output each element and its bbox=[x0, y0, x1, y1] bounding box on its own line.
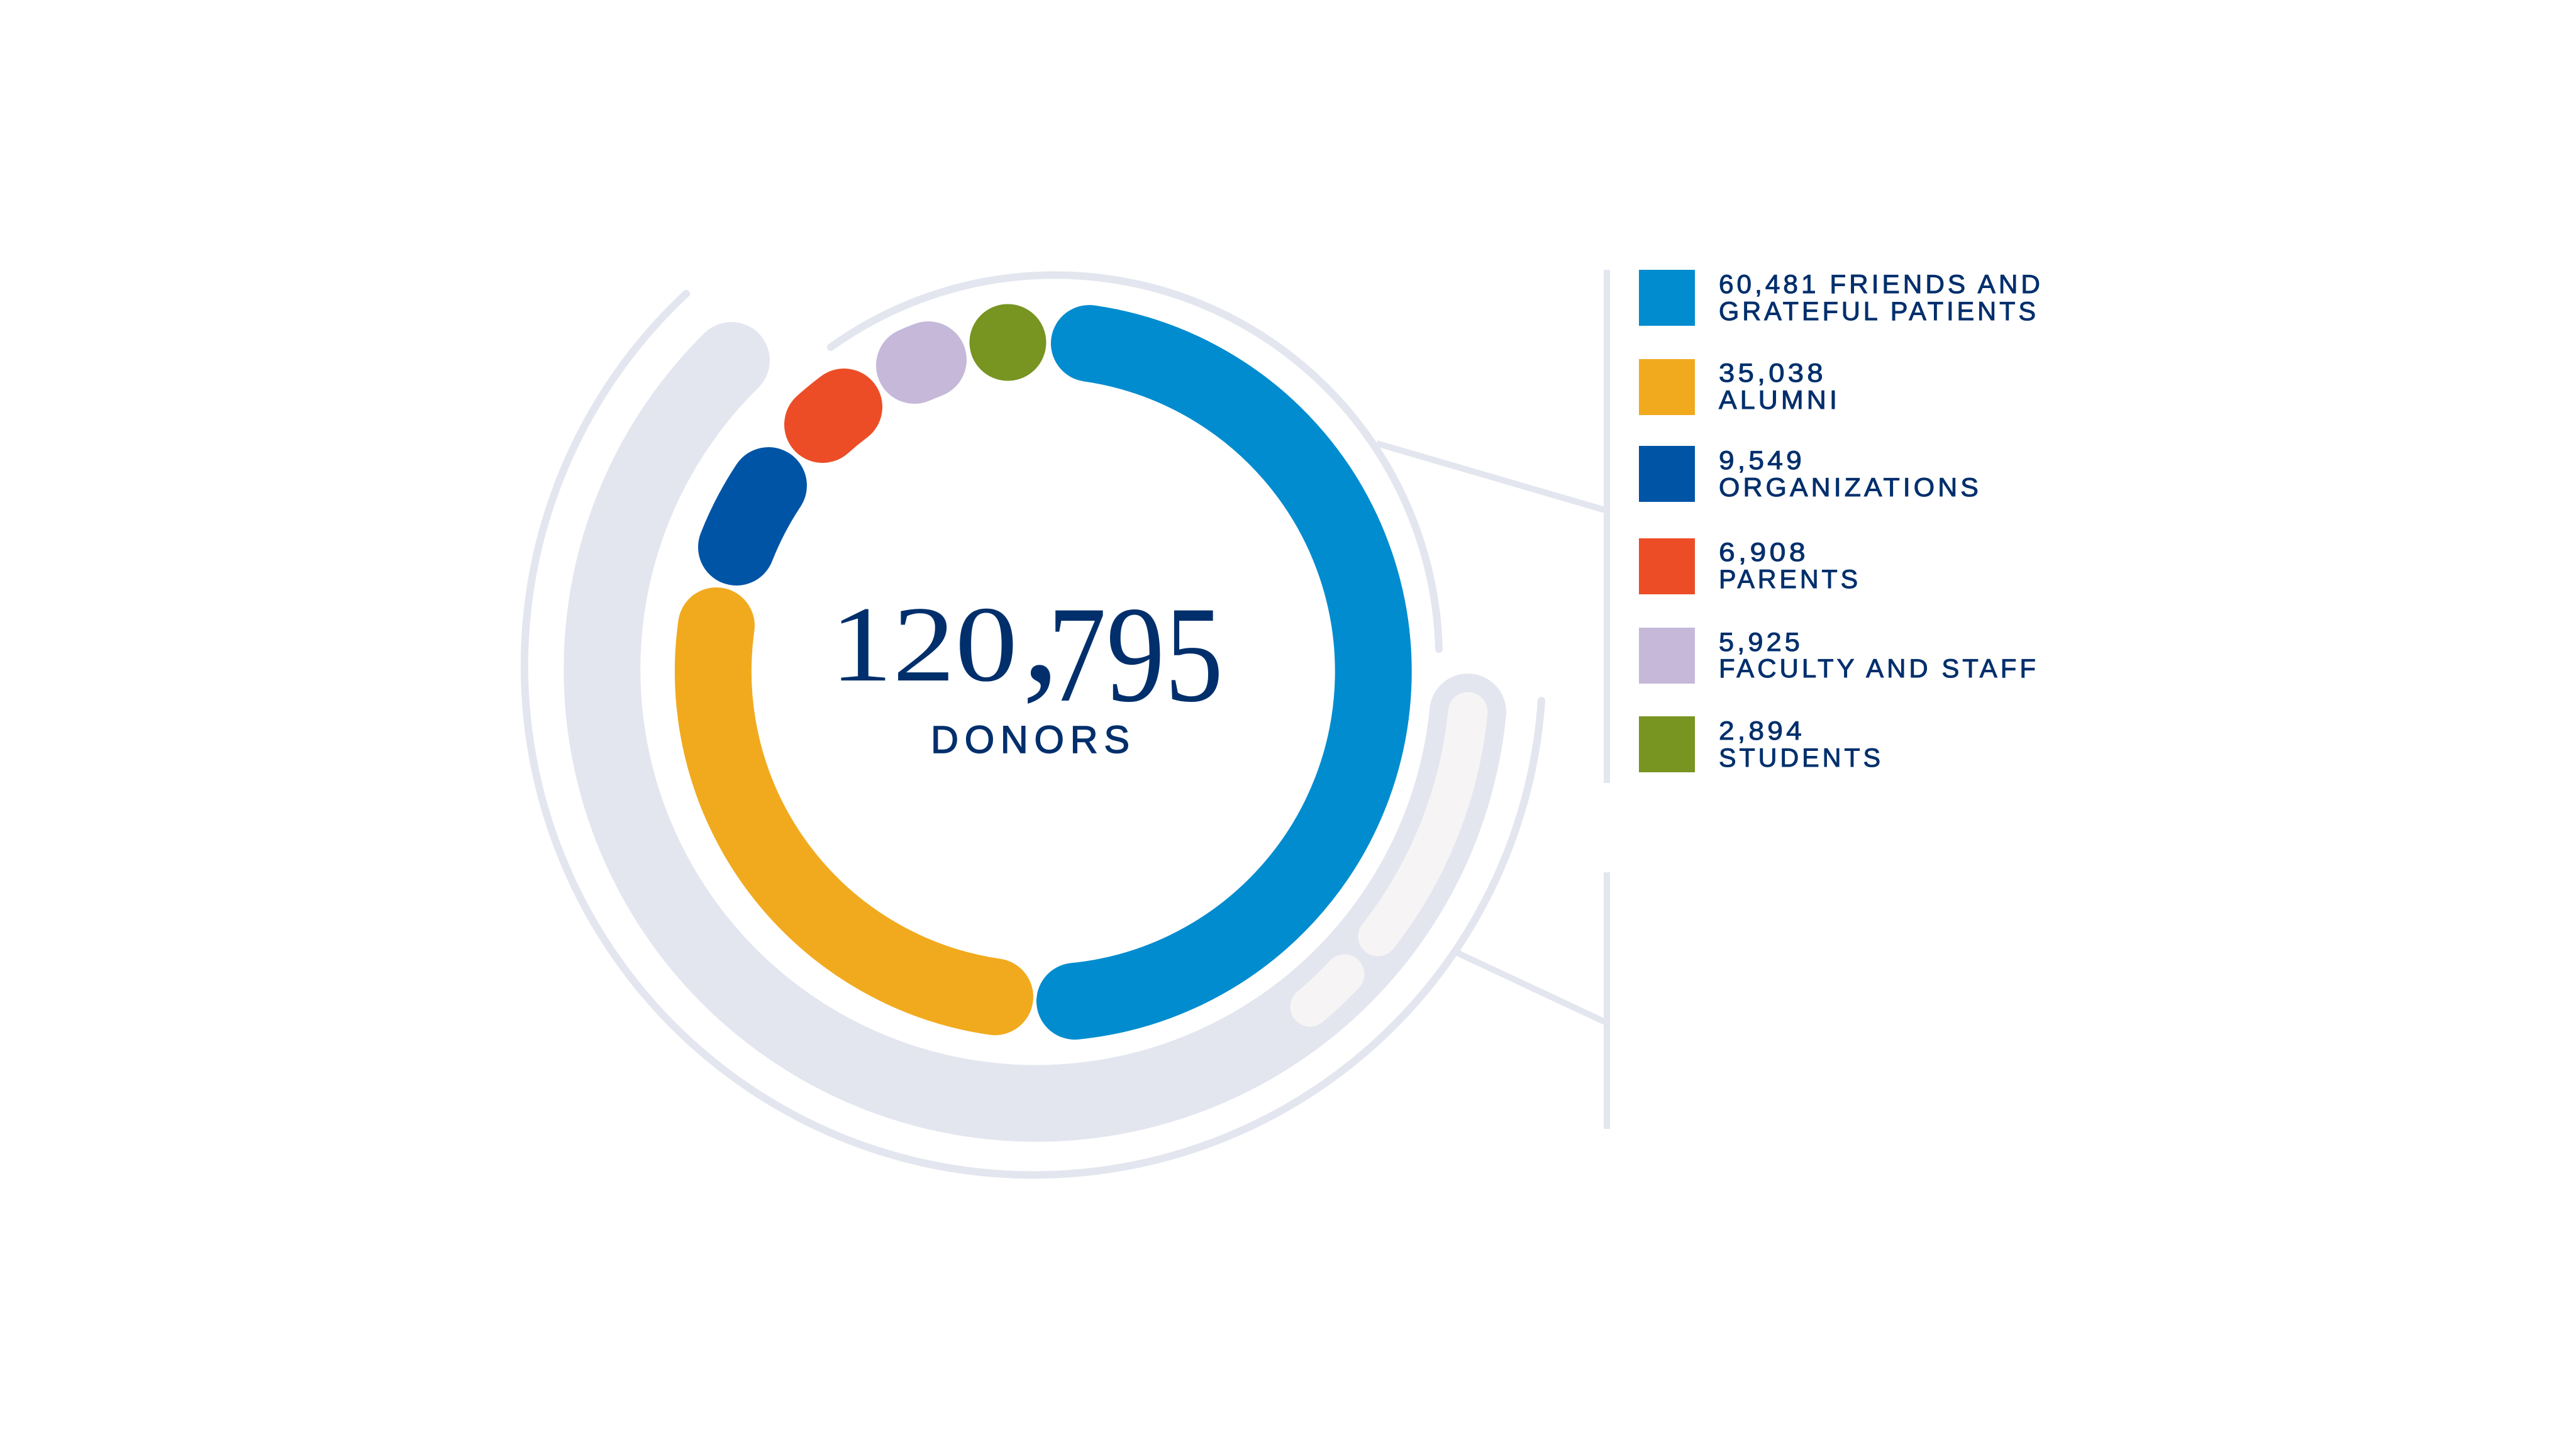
legend item: parents bbox=[1639, 537, 1861, 594]
grey background ring bbox=[602, 360, 1468, 1103]
segment: parents bbox=[823, 407, 844, 425]
segment: students bbox=[970, 304, 1046, 381]
segment: organizations bbox=[736, 486, 769, 547]
legend item: parents: PARENTS bbox=[1719, 564, 1861, 594]
legend item: organizations: ORGANIZATIONS bbox=[1719, 472, 1982, 502]
legend rule: upper bbox=[1604, 270, 1610, 783]
legend item: alumni: ALUMNI bbox=[1719, 385, 1840, 414]
connector: lower bbox=[1457, 953, 1605, 1022]
segment: friends and grateful patients bbox=[1075, 343, 1374, 1001]
legend item: organizations bbox=[1639, 445, 1982, 502]
light pill: upper bbox=[1378, 712, 1468, 936]
legend rule: lower bbox=[1604, 872, 1610, 1129]
legend bbox=[1639, 269, 2043, 772]
legend item: organizations: 9,549 bbox=[1719, 445, 1805, 475]
legend item: students: STUDENTS bbox=[1719, 743, 1884, 772]
legend item: friends and grateful patients: 60,481 FRIENDS AND bbox=[1719, 269, 2043, 299]
total donors number: 120 bbox=[830, 585, 1018, 704]
segment: faculty and staff bbox=[914, 360, 928, 365]
legend item: alumni bbox=[1639, 358, 1840, 415]
legend item: students: 2,894 bbox=[1719, 716, 1805, 745]
light pill: lower bbox=[1310, 974, 1345, 1007]
legend item: friends and grateful patients bbox=[1639, 269, 2043, 326]
legend item: faculty and staff: 5,925 bbox=[1719, 627, 1803, 657]
connector: upper bbox=[1377, 443, 1605, 510]
legend item: faculty and staff bbox=[1639, 627, 2039, 684]
legend item: alumni: 35,038 bbox=[1719, 358, 1826, 387]
donut chart bbox=[713, 304, 1374, 1001]
legend item: faculty and staff: FACULTY AND STAFF bbox=[1719, 653, 2039, 683]
donors label: DONORS bbox=[931, 718, 1130, 761]
total donors number: , bbox=[1022, 546, 1060, 713]
legend item: parents: 6,908 bbox=[1719, 537, 1809, 567]
legend item: friends and grateful patients: GRATEFUL PATIENTS bbox=[1719, 296, 2039, 326]
legend item: students bbox=[1639, 716, 1884, 772]
outer thin arc bbox=[525, 294, 1541, 1175]
segment: alumni bbox=[713, 626, 995, 997]
inner thin arc bbox=[831, 275, 1439, 649]
total donors number: 795 bbox=[1048, 579, 1223, 731]
